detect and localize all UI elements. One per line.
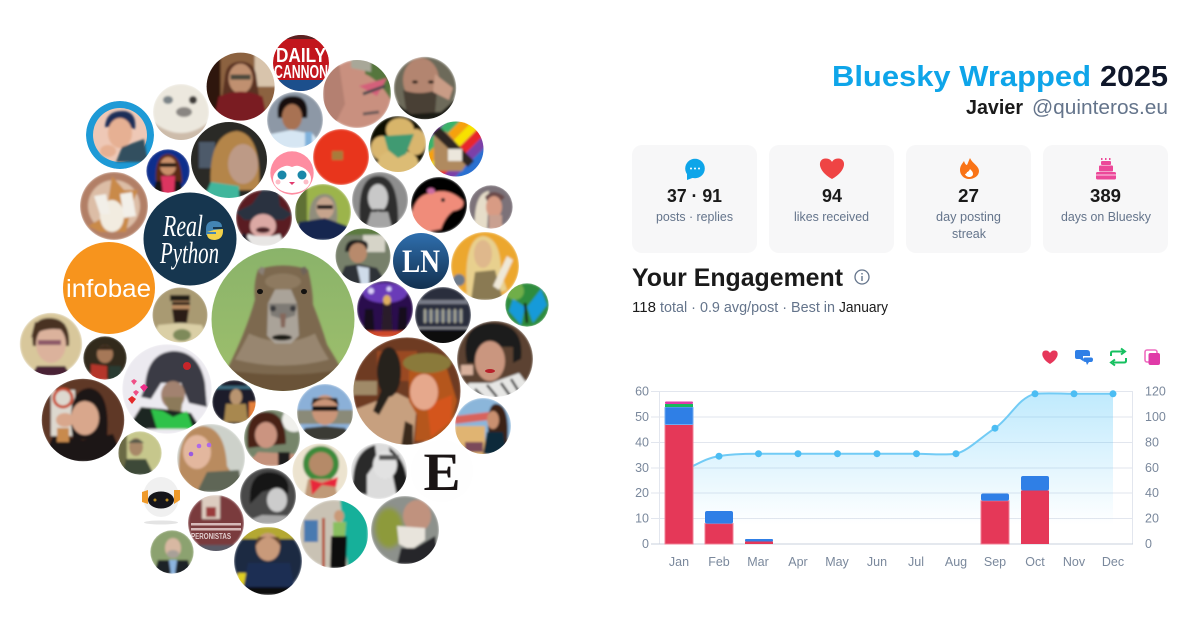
profile name and handle [966, 97, 1168, 119]
avatar: man with white beard [371, 496, 439, 564]
stat card: day posting streak: 27 [958, 186, 979, 206]
avatar: El Videoclub Argento badge [86, 101, 154, 169]
month labels: May [825, 555, 850, 569]
month labels [669, 555, 1124, 569]
avatar: grayscale woman with long hair [351, 443, 407, 499]
stat card: likes received [769, 145, 894, 253]
month labels: Oct [1025, 555, 1045, 569]
combo chart: monthly engagement [635, 384, 1166, 569]
line: cumulative total [679, 393, 1113, 473]
avatar: black and white portrait [352, 172, 408, 228]
avatar: El Economista E logo: E [424, 442, 460, 502]
avatar: Peronistas wall [186, 495, 246, 553]
icon: heart [820, 158, 844, 179]
left axis labels: 0 [642, 537, 649, 551]
avatar: white robot [142, 477, 180, 524]
stat card: likes received: 94 [822, 186, 842, 206]
avatar: man in ushanka with hearts [122, 344, 212, 434]
stat card: days on Bluesky [1043, 145, 1168, 253]
avatar: woman with curly black hair [457, 321, 533, 397]
avatar: chipa with green scarf [370, 116, 426, 174]
avatar: pink capybara drawing [411, 177, 467, 233]
avatar: capybara photo (largest bubble) [211, 248, 355, 400]
right axis labels: 60 [1145, 461, 1159, 475]
month labels: Sep [984, 555, 1006, 569]
avatar: man with glasses at brick wall [20, 313, 82, 376]
avatar: woman with headscarf [469, 185, 513, 231]
avatar: woman with no-smoking sign [41, 378, 125, 462]
avatar: wiphala flag illustration [428, 122, 484, 176]
avatar: concert on purple stage [357, 281, 413, 337]
stat card: day posting streak [906, 145, 1031, 253]
avatar: golden illustrated woman [451, 232, 519, 300]
right axis labels: 120 [1145, 384, 1166, 398]
avatar: Daily Cannon logo: DAILY [276, 45, 327, 67]
avatar: classical painting of a woman [351, 337, 461, 447]
avatar: man with guitar on yellow wall [118, 431, 162, 475]
avatar: pink anime face [270, 151, 314, 195]
month labels: Feb [708, 555, 730, 569]
avatar: man in suit outdoors [335, 228, 391, 284]
profile name and handle: Javier [966, 97, 1023, 119]
profile name and handle: @quinteros.eu [1032, 97, 1168, 119]
icon: info [855, 270, 869, 284]
avatar: older man in jacket [150, 530, 194, 574]
avatar: infobae logo [63, 242, 155, 334]
stat card: posts and replies [632, 145, 757, 253]
avatar: man at desk [83, 336, 127, 380]
month labels: Mar [747, 555, 769, 569]
stat card: day posting streak: streak [952, 226, 986, 241]
icon: birthday cake [1096, 158, 1116, 180]
avatar: Real Python logo: Python [159, 235, 219, 270]
avatar: caricature with hat [236, 190, 292, 246]
avatar: black and white woman [240, 468, 296, 524]
month labels: Dec [1102, 555, 1124, 569]
avatar: person with glasses [206, 52, 275, 121]
avatar: cartoon woman with sunglasses [146, 149, 190, 195]
heading: Your Engagement: Your Engagement [632, 264, 844, 292]
avatar: Real Python logo: Real [162, 208, 203, 243]
right axis labels: 20 [1145, 512, 1159, 526]
avatar: La Nacion logo [393, 233, 449, 289]
stat card: days on Bluesky: 389 [1090, 186, 1121, 206]
avatar: blonde woman with sunglasses [295, 184, 351, 240]
left axis labels: 60 [635, 384, 649, 398]
icon: like legend [1042, 350, 1058, 364]
title: Bluesky Wrapped [832, 61, 1091, 93]
left axis labels: 50 [635, 410, 649, 424]
line points [716, 390, 1116, 460]
avatar: red fabric [313, 129, 369, 185]
right axis labels [1145, 384, 1166, 551]
avatar: mixer board [413, 287, 473, 345]
avatar: tattooed shoulder [323, 58, 391, 128]
stat card: days on Bluesky: days on Bluesky [1061, 209, 1151, 224]
avatar: infobae logo: infobae [66, 275, 151, 303]
area: cumulative fill [679, 393, 1113, 544]
avatar: blue butterfly [505, 282, 549, 327]
stat card: posts and replies: posts · replies [656, 209, 733, 224]
avatar: blonde woman with butterfly stickers [177, 424, 245, 494]
icon: reply legend [1075, 350, 1093, 365]
month labels: Jun [867, 555, 887, 569]
avatar: illustrated wreath with red bow [292, 443, 348, 499]
icon: speech bubble [685, 159, 705, 180]
avatar: bald bearded man [393, 57, 457, 120]
avatar cloud [20, 33, 549, 595]
avatar: Daily Cannon logo [273, 35, 329, 91]
month labels: Apr [788, 555, 808, 569]
left axis labels: 40 [635, 436, 649, 450]
avatar: woman in green top with teal backdrop [300, 500, 368, 568]
month labels: Jul [908, 555, 924, 569]
left axis labels: 30 [635, 461, 649, 475]
left axis labels: 10 [635, 512, 649, 526]
avatar: El Economista E logo [411, 440, 473, 502]
left axis labels [635, 384, 649, 551]
avatar: man with sunglasses [297, 384, 353, 440]
icon: quote legend [1145, 350, 1160, 365]
avatar: woman on balcony [455, 398, 511, 456]
icon: repost legend [1111, 348, 1126, 366]
right axis labels: 0 [1145, 537, 1152, 551]
bars: stacked likes, replies, reposts, quotes [665, 402, 1049, 544]
right axis labels: 40 [1145, 486, 1159, 500]
icon: flame [960, 158, 979, 179]
engagement summary line [632, 300, 889, 316]
stat card: day posting streak: day posting [936, 209, 1001, 224]
month labels: Aug [945, 555, 967, 569]
avatar: white dog [153, 84, 209, 142]
engagement summary line: 118 [632, 300, 656, 316]
avatar: curly-haired person [189, 120, 269, 200]
avatar: footballer [267, 92, 323, 148]
avatar: Real Python logo [144, 192, 236, 286]
engagement summary line: January [839, 300, 889, 316]
stat card: posts and replies: 37 · 91 [667, 186, 722, 206]
avatar: Peronistas wall: PERONISTAS [191, 532, 232, 541]
right axis labels: 80 [1145, 436, 1159, 450]
stat card: likes received: likes received [794, 209, 869, 224]
chart legend icons [1042, 348, 1160, 366]
avatar: small golden figure [212, 380, 257, 424]
avatar: cat with white hands [80, 172, 148, 240]
title: 2025 [1100, 61, 1168, 93]
avatar: bearded man with sunglasses [152, 287, 208, 343]
left axis labels: 20 [635, 486, 649, 500]
month labels: Nov [1063, 555, 1086, 569]
engagement summary line: total · 0.9 avg/post · Best in [660, 300, 835, 316]
avatar: woman in navy vest [234, 527, 302, 595]
month labels: Jan [669, 555, 689, 569]
avatar: woman resting chin on hand [244, 410, 300, 466]
avatar: La Nacion logo: LN [402, 244, 440, 280]
avatar: Daily Cannon logo: CANNON [274, 62, 328, 82]
right axis labels: 100 [1145, 410, 1166, 424]
